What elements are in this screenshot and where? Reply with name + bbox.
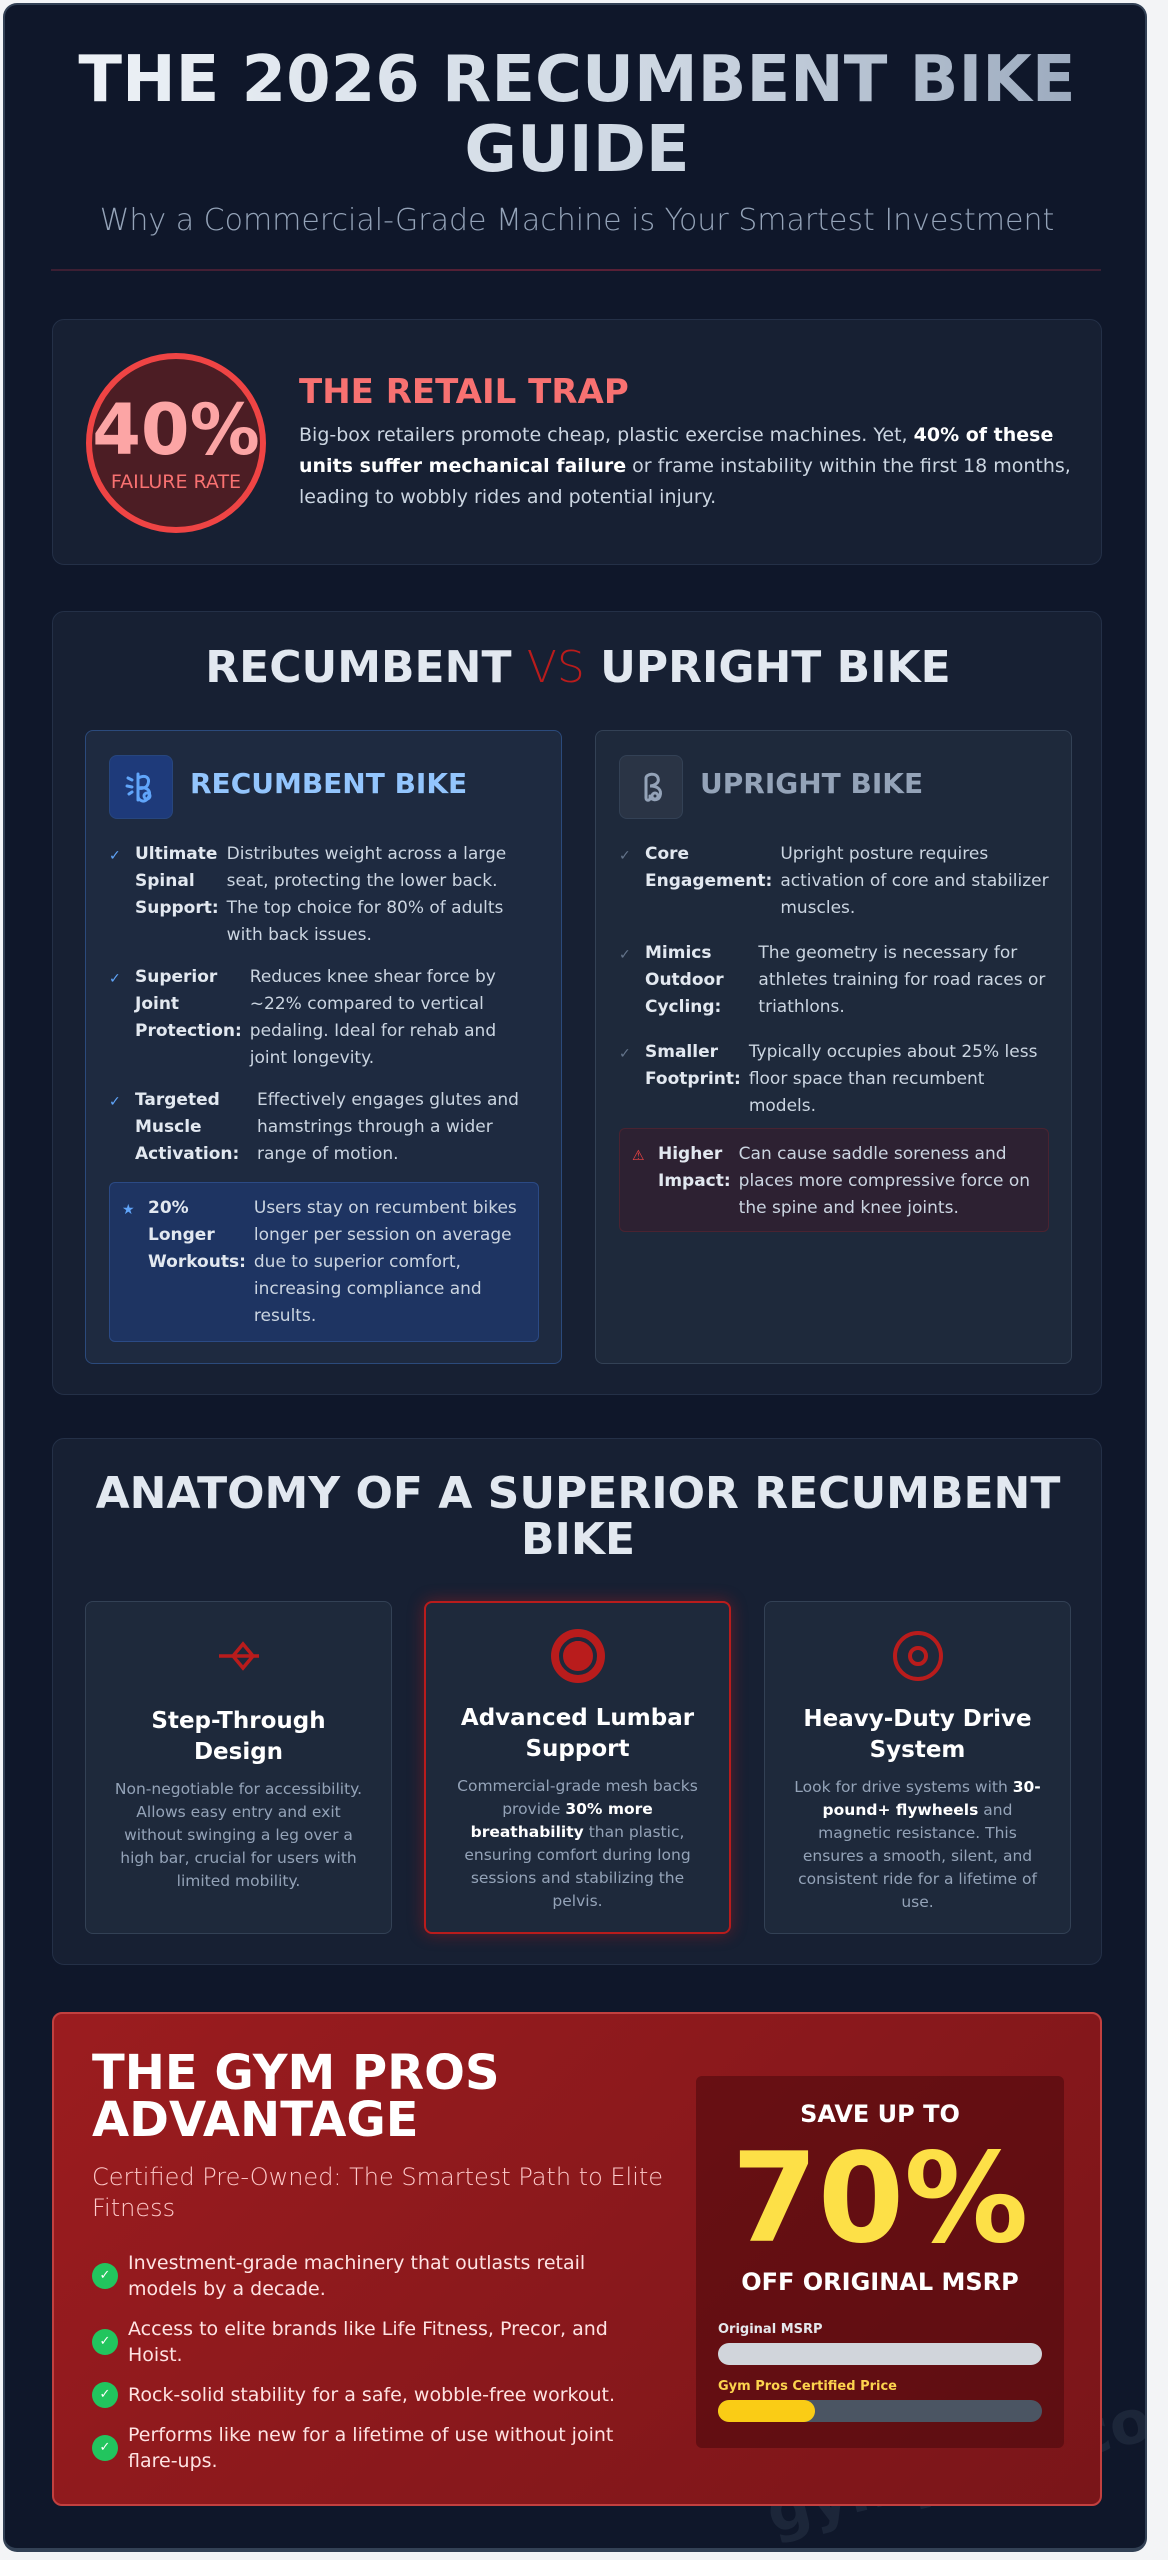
heading (92, 2045, 500, 2148)
savings box: OFF ORIGINAL MSRP (741, 2268, 1019, 2296)
heading: THE GYM PROS (92, 2045, 500, 2101)
icon: upright (619, 755, 683, 819)
list: recumbent benefits: ✓ (109, 971, 121, 987)
panel: anatomy (52, 1438, 1102, 1965)
benefit list: ✓ (100, 2387, 110, 2402)
callout: 20% longer workouts (109, 1182, 539, 1342)
list: recumbent benefits: ✓ (109, 848, 121, 864)
panel: recumbent vs upright (52, 611, 1102, 1395)
card: heavy-duty drive: System (870, 1737, 965, 1763)
card: step-through: Step-Through (151, 1708, 326, 1734)
list: recumbent benefits: Ultimate Spinal Support: (135, 844, 219, 918)
list: recumbent benefits: Superior Joint Protection: (135, 967, 242, 1041)
warning box: higher impact: Higher Impact: (658, 1144, 731, 1191)
title: GUIDE (464, 113, 690, 187)
benefit list: Access to elite brands like Life Fitness, Precor, and Hoist. (128, 2318, 608, 2366)
benefit list: Rock-solid stability for a safe, wobble-free workout. (128, 2384, 615, 2406)
warning box: higher impact (619, 1128, 1049, 1232)
card: lumbar support (highlighted): Advanced Lumbar (461, 1705, 694, 1731)
benefit list (92, 2252, 615, 2472)
benefit list: Investment-grade machinery that outlasts retail models by a decade. (128, 2252, 585, 2300)
body text: Big-box retailers promote cheap, plastic exercise machines. Yet, 40% of these units suffer mechanical failure or frame instability within the first 18 months, leading to wobbly rides and potential injury. (299, 424, 1071, 508)
heading: BIKE (521, 1514, 635, 1565)
callout: 20% longer workouts: ★ (122, 1202, 135, 1218)
list: upright points: Core Engagement: (645, 844, 772, 891)
callout: 20% longer workouts: Users stay on recumbent bikes longer per session on average due to superior comfort, increasing compliance and results. (254, 1198, 517, 1326)
stat circle: 40% (86, 353, 266, 533)
panel: retail trap (52, 319, 1102, 565)
big stat: 70%: 70% (732, 2127, 1028, 2271)
list: recumbent benefits: Distributes weight across a large seat, protecting the lower back. The top choice for 80% of adults with back issues. (227, 844, 506, 945)
title: THE 2026 RECUMBENT BIKE (78, 43, 1076, 117)
bar chart: price comparison (718, 2322, 1042, 2422)
benefit list: Performs like new for a lifetime of use without joint flare-ups. (128, 2424, 613, 2472)
stat circle: 40%: FAILURE RATE (111, 471, 241, 493)
icon: lumbar (551, 1629, 605, 1683)
card: heavy-duty drive (764, 1601, 1071, 1934)
list: recumbent benefits: Targeted Muscle Activation: (135, 1090, 239, 1164)
icon: recumbent (109, 755, 173, 819)
benefit list: ✓ (100, 2440, 110, 2455)
card: recumbent (85, 730, 562, 1364)
card: lumbar support (highlighted): Commercial-grade mesh backs provide 30% more breathability than plastic, ensuring comfort during long sessions and stabilizing the pelvis. (457, 1777, 698, 1910)
list: upright points (619, 844, 1049, 1116)
card: lumbar support (highlighted): Support (525, 1736, 630, 1762)
list: recumbent benefits: Effectively engages glutes and hamstrings through a wider range of motion. (257, 1090, 519, 1164)
icon: flywheel (893, 1631, 943, 1681)
callout: 20% longer workouts: 20% Longer Workouts: (148, 1198, 246, 1272)
benefit list: ✓ (100, 2268, 110, 2283)
list: recumbent benefits (109, 844, 519, 1164)
list: upright points: ✓ (619, 848, 631, 864)
panel: gym pros advantage (52, 2012, 1102, 2506)
heading: ADVANTAGE (92, 2092, 419, 2148)
icon: step-through (219, 1641, 259, 1671)
warning box: higher impact: ⚠ (632, 1148, 645, 1164)
card: heavy-duty drive: Look for drive systems with 30-pound+ flywheels and magnetic resistance. This ensures a smooth, silent, and consistent ride for a lifetime of use. (794, 1778, 1041, 1911)
card: heavy-duty drive: Heavy-Duty Drive (803, 1706, 1032, 1732)
list: upright points: ✓ (619, 947, 631, 963)
heading: RECUMBENT VS UPRIGHT BIKE (205, 642, 951, 693)
subheading: Certified Pre-Owned: The Smartest Path to Elite Fitness (92, 2163, 663, 2222)
savings box: SAVE UP TO (800, 2100, 960, 2128)
list: recumbent benefits: Reduces knee shear force by ~22% compared to vertical pedaling. Ideal for rehab and joint longevity. (250, 967, 496, 1068)
savings box (696, 2076, 1064, 2448)
warning box: higher impact: Can cause saddle soreness and places more compressive force on the spine and knee joints. (739, 1144, 1030, 1218)
card: lumbar support (highlighted) (424, 1601, 731, 1934)
subtitle: Why a Commercial-Grade Machine is Your Smartest Investment (100, 203, 1054, 238)
card: step-through: Design (194, 1739, 283, 1765)
card: upright (595, 730, 1072, 1364)
list: upright points: Upright posture requires activation of core and stabilizer muscles. (780, 844, 1049, 918)
list: upright points: Typically occupies about 25% less floor space than recumbent models. (749, 1042, 1037, 1116)
bar chart: price comparison: Gym Pros Certified Price (718, 2379, 897, 2394)
stat circle: 40%: 40% (92, 389, 260, 471)
card: step-through: Non-negotiable for accessibility. Allows easy entry and exit without swinging a leg over a high bar, crucial for users with limited mobility. (115, 1780, 362, 1890)
list: upright points: The geometry is necessary for athletes training for road races or triathlons. (758, 943, 1045, 1017)
title (5, 45, 1149, 185)
title: recumbent bike: RECUMBENT BIKE (190, 767, 467, 800)
list: upright points: Mimics Outdoor Cycling: (645, 943, 724, 1017)
heading: ANATOMY OF A SUPERIOR RECUMBENT (96, 1468, 1060, 1519)
card: step-through (85, 1601, 392, 1934)
list: recumbent benefits: ✓ (109, 1094, 121, 1110)
list: upright points: ✓ (619, 1046, 631, 1062)
bar chart: price comparison: Original MSRP (718, 2322, 823, 2337)
list: upright points: Smaller Footprint: (645, 1042, 741, 1089)
benefit list: ✓ (100, 2334, 110, 2349)
heading: retail trap: THE RETAIL TRAP (299, 372, 629, 412)
title: upright bike: UPRIGHT BIKE (700, 767, 923, 800)
heading (96, 1468, 1060, 1565)
